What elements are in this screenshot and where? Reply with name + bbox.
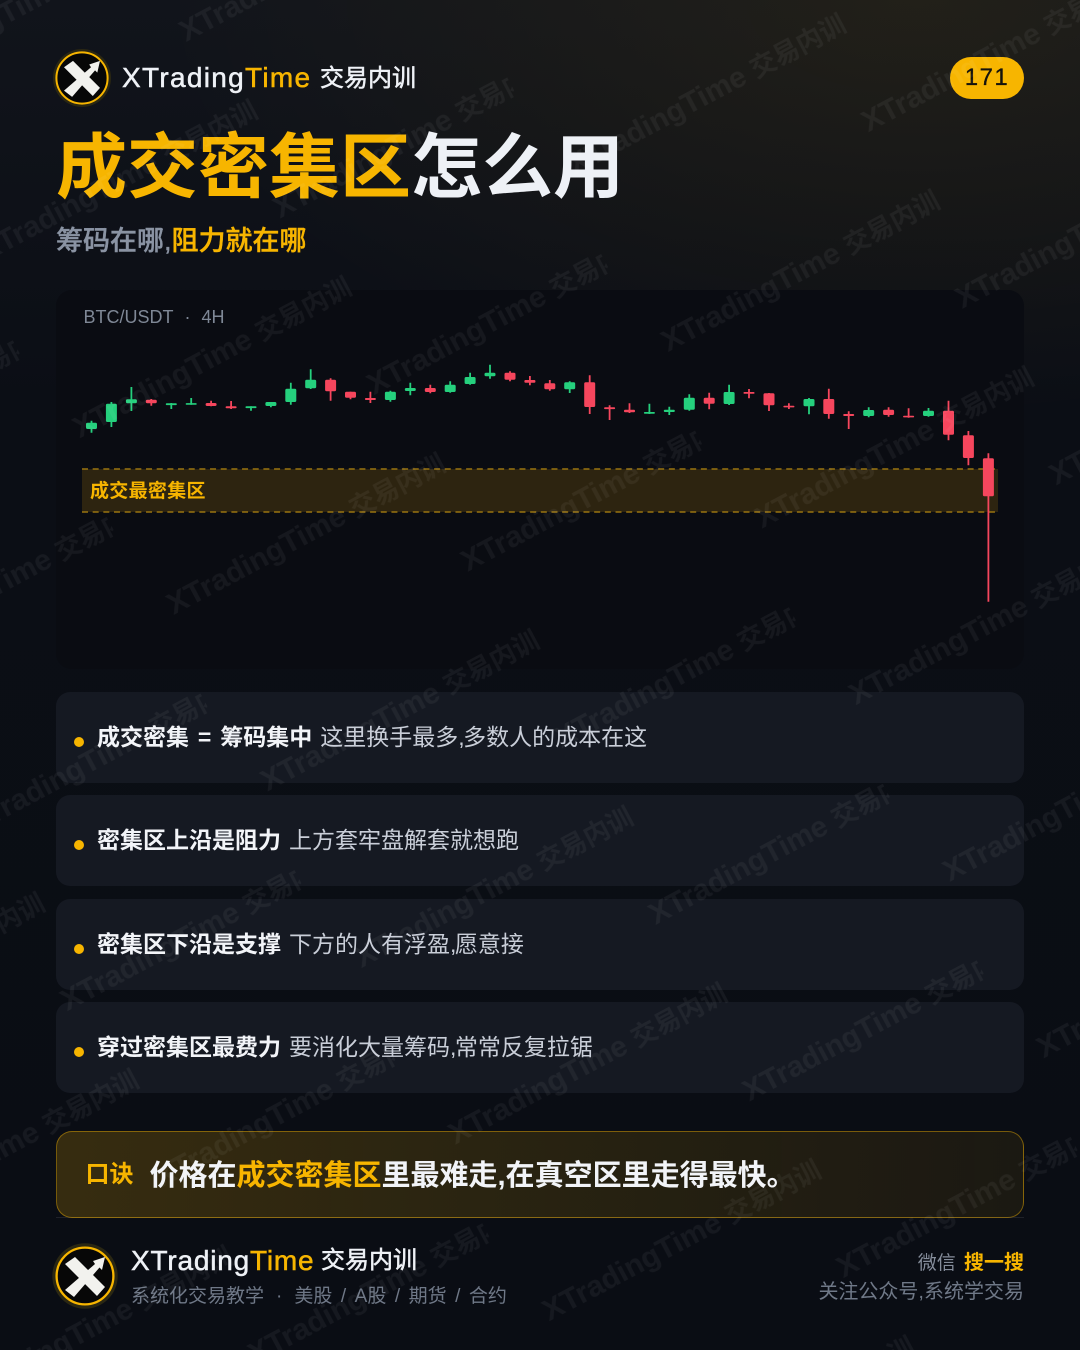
zone label: 成交最密集区 bbox=[90, 480, 206, 502]
footer logo bbox=[52, 1243, 118, 1309]
callout tag: 口诀 bbox=[86, 1161, 134, 1188]
footer follow note: 关注公众号,系统学交易 bbox=[818, 1281, 1024, 1303]
footer brand name: 交易内训 bbox=[321, 1246, 417, 1274]
subtitle: 筹码在哪,阻力就在哪 bbox=[56, 226, 307, 256]
red candles bbox=[146, 371, 994, 602]
callout: mantra bbox=[56, 1131, 1024, 1218]
bullet bbox=[74, 736, 84, 746]
card: point 1 bbox=[56, 692, 1024, 782]
chart label: BTC/USDT · 4H bbox=[84, 307, 225, 327]
issue number badge: 171 bbox=[965, 64, 1009, 91]
footer brand name bbox=[131, 1244, 417, 1276]
text: 穿过密集区最费力 要消化大量筹码,常常反复拉锯 bbox=[97, 1034, 593, 1060]
footer brand name: XTradingTime bbox=[131, 1244, 314, 1276]
bullet bbox=[74, 944, 84, 954]
card: point 4 bbox=[56, 1002, 1024, 1093]
header brand name bbox=[122, 62, 416, 94]
panel: candlestick chart bbox=[56, 290, 1024, 669]
bullet bbox=[74, 1047, 84, 1057]
issue number badge bbox=[950, 57, 1024, 99]
callout text: 价格在成交密集区里最难走,在真空区里走得最快。 bbox=[150, 1160, 796, 1192]
text: 密集区下沿是支撑 下方的人有浮盈,愿意接 bbox=[97, 930, 524, 956]
bullet bbox=[74, 840, 84, 850]
card: point 3 bbox=[56, 898, 1024, 990]
header logo bbox=[53, 49, 111, 107]
header brand name: XTradingTime bbox=[122, 62, 311, 93]
text: 成交密集 = 筹码集中 这里换手最多,多数人的成本在这 bbox=[97, 724, 647, 750]
header brand name: 交易内训 bbox=[320, 65, 416, 92]
title: 成交密集区怎么用 bbox=[56, 129, 624, 208]
footer wechat search: 微信 搜一搜 bbox=[918, 1252, 1024, 1274]
card: point 2 bbox=[56, 795, 1024, 886]
footer divider bbox=[56, 1217, 1024, 1218]
text: 密集区上沿是阻力 上方套牢盘解套就想跑 bbox=[97, 827, 519, 853]
footer tagline: 系统化交易教学 · 美股 / A股 / 期货 / 合约 bbox=[131, 1286, 507, 1307]
green candles bbox=[86, 365, 934, 433]
